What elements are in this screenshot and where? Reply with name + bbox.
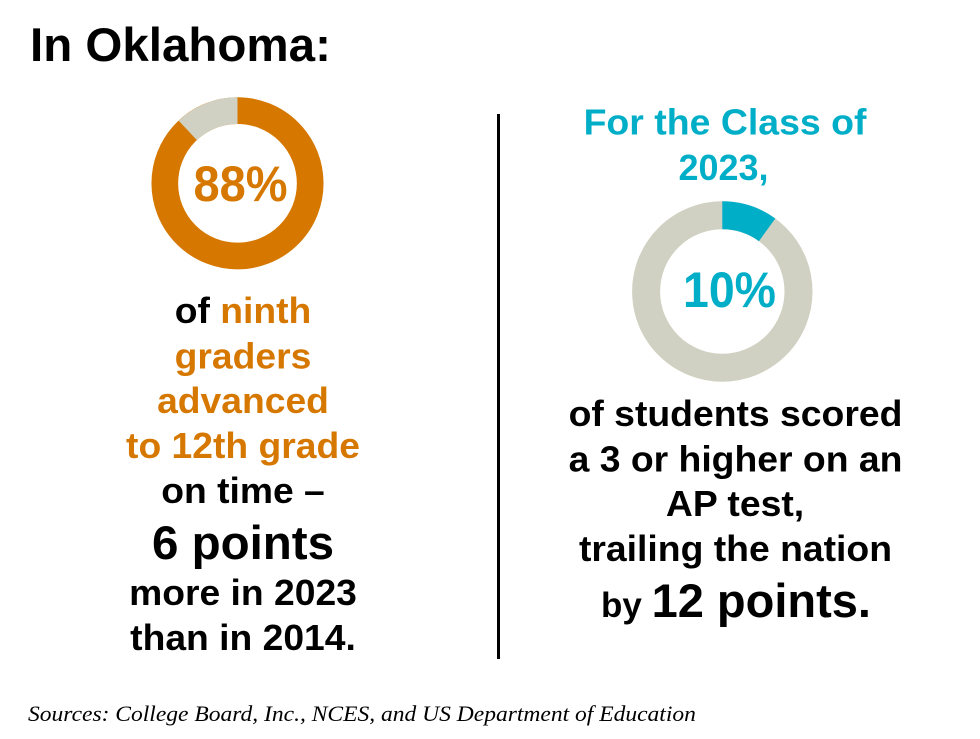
text block: ninth graders advanced on time: more in 2023 — [129, 573, 357, 613]
text block: ninth graders advanced on time: on time – — [161, 471, 325, 511]
text block: ninth graders advanced on time: to 12th grade — [126, 426, 360, 466]
donut chart: 88%: 88% — [194, 156, 288, 212]
donut chart: 88% — [165, 97, 310, 256]
text block: ninth graders advanced on time: 6 points — [152, 517, 334, 570]
text block: ninth graders advanced on time: than in 2014. — [130, 618, 356, 658]
text block: ninth graders advanced on time: advanced — [157, 381, 329, 421]
text block: AP test results: AP test, — [666, 484, 804, 524]
text block: ninth graders advanced on time: graders — [175, 336, 311, 376]
heading: For the Class of 2023: For the Class of — [584, 102, 867, 142]
donut chart: 10% — [646, 201, 798, 368]
text block: AP test results: of students scored — [569, 394, 902, 434]
text block: AP test results — [569, 394, 902, 627]
divider line — [497, 114, 500, 659]
heading: For the Class of 2023: 2023, — [678, 147, 769, 188]
text block: ninth graders advanced on time — [126, 291, 360, 658]
title: In Oklahoma: — [30, 19, 331, 72]
text block: AP test results: a 3 or higher on an — [569, 439, 902, 479]
panel: Class of 2023 — [569, 102, 902, 627]
text block: AP test results: by 12 points. — [601, 574, 871, 627]
heading: For the Class of 2023 — [584, 102, 867, 188]
text block: AP test results: trailing the nation — [579, 529, 892, 569]
panel: ninth graders — [126, 97, 360, 658]
sources note: Sources: College Board, Inc., NCES, and US Department of Education — [28, 702, 696, 726]
text block: ninth graders advanced on time: of ninth — [175, 291, 311, 331]
donut chart: 10%: 10% — [683, 262, 776, 318]
